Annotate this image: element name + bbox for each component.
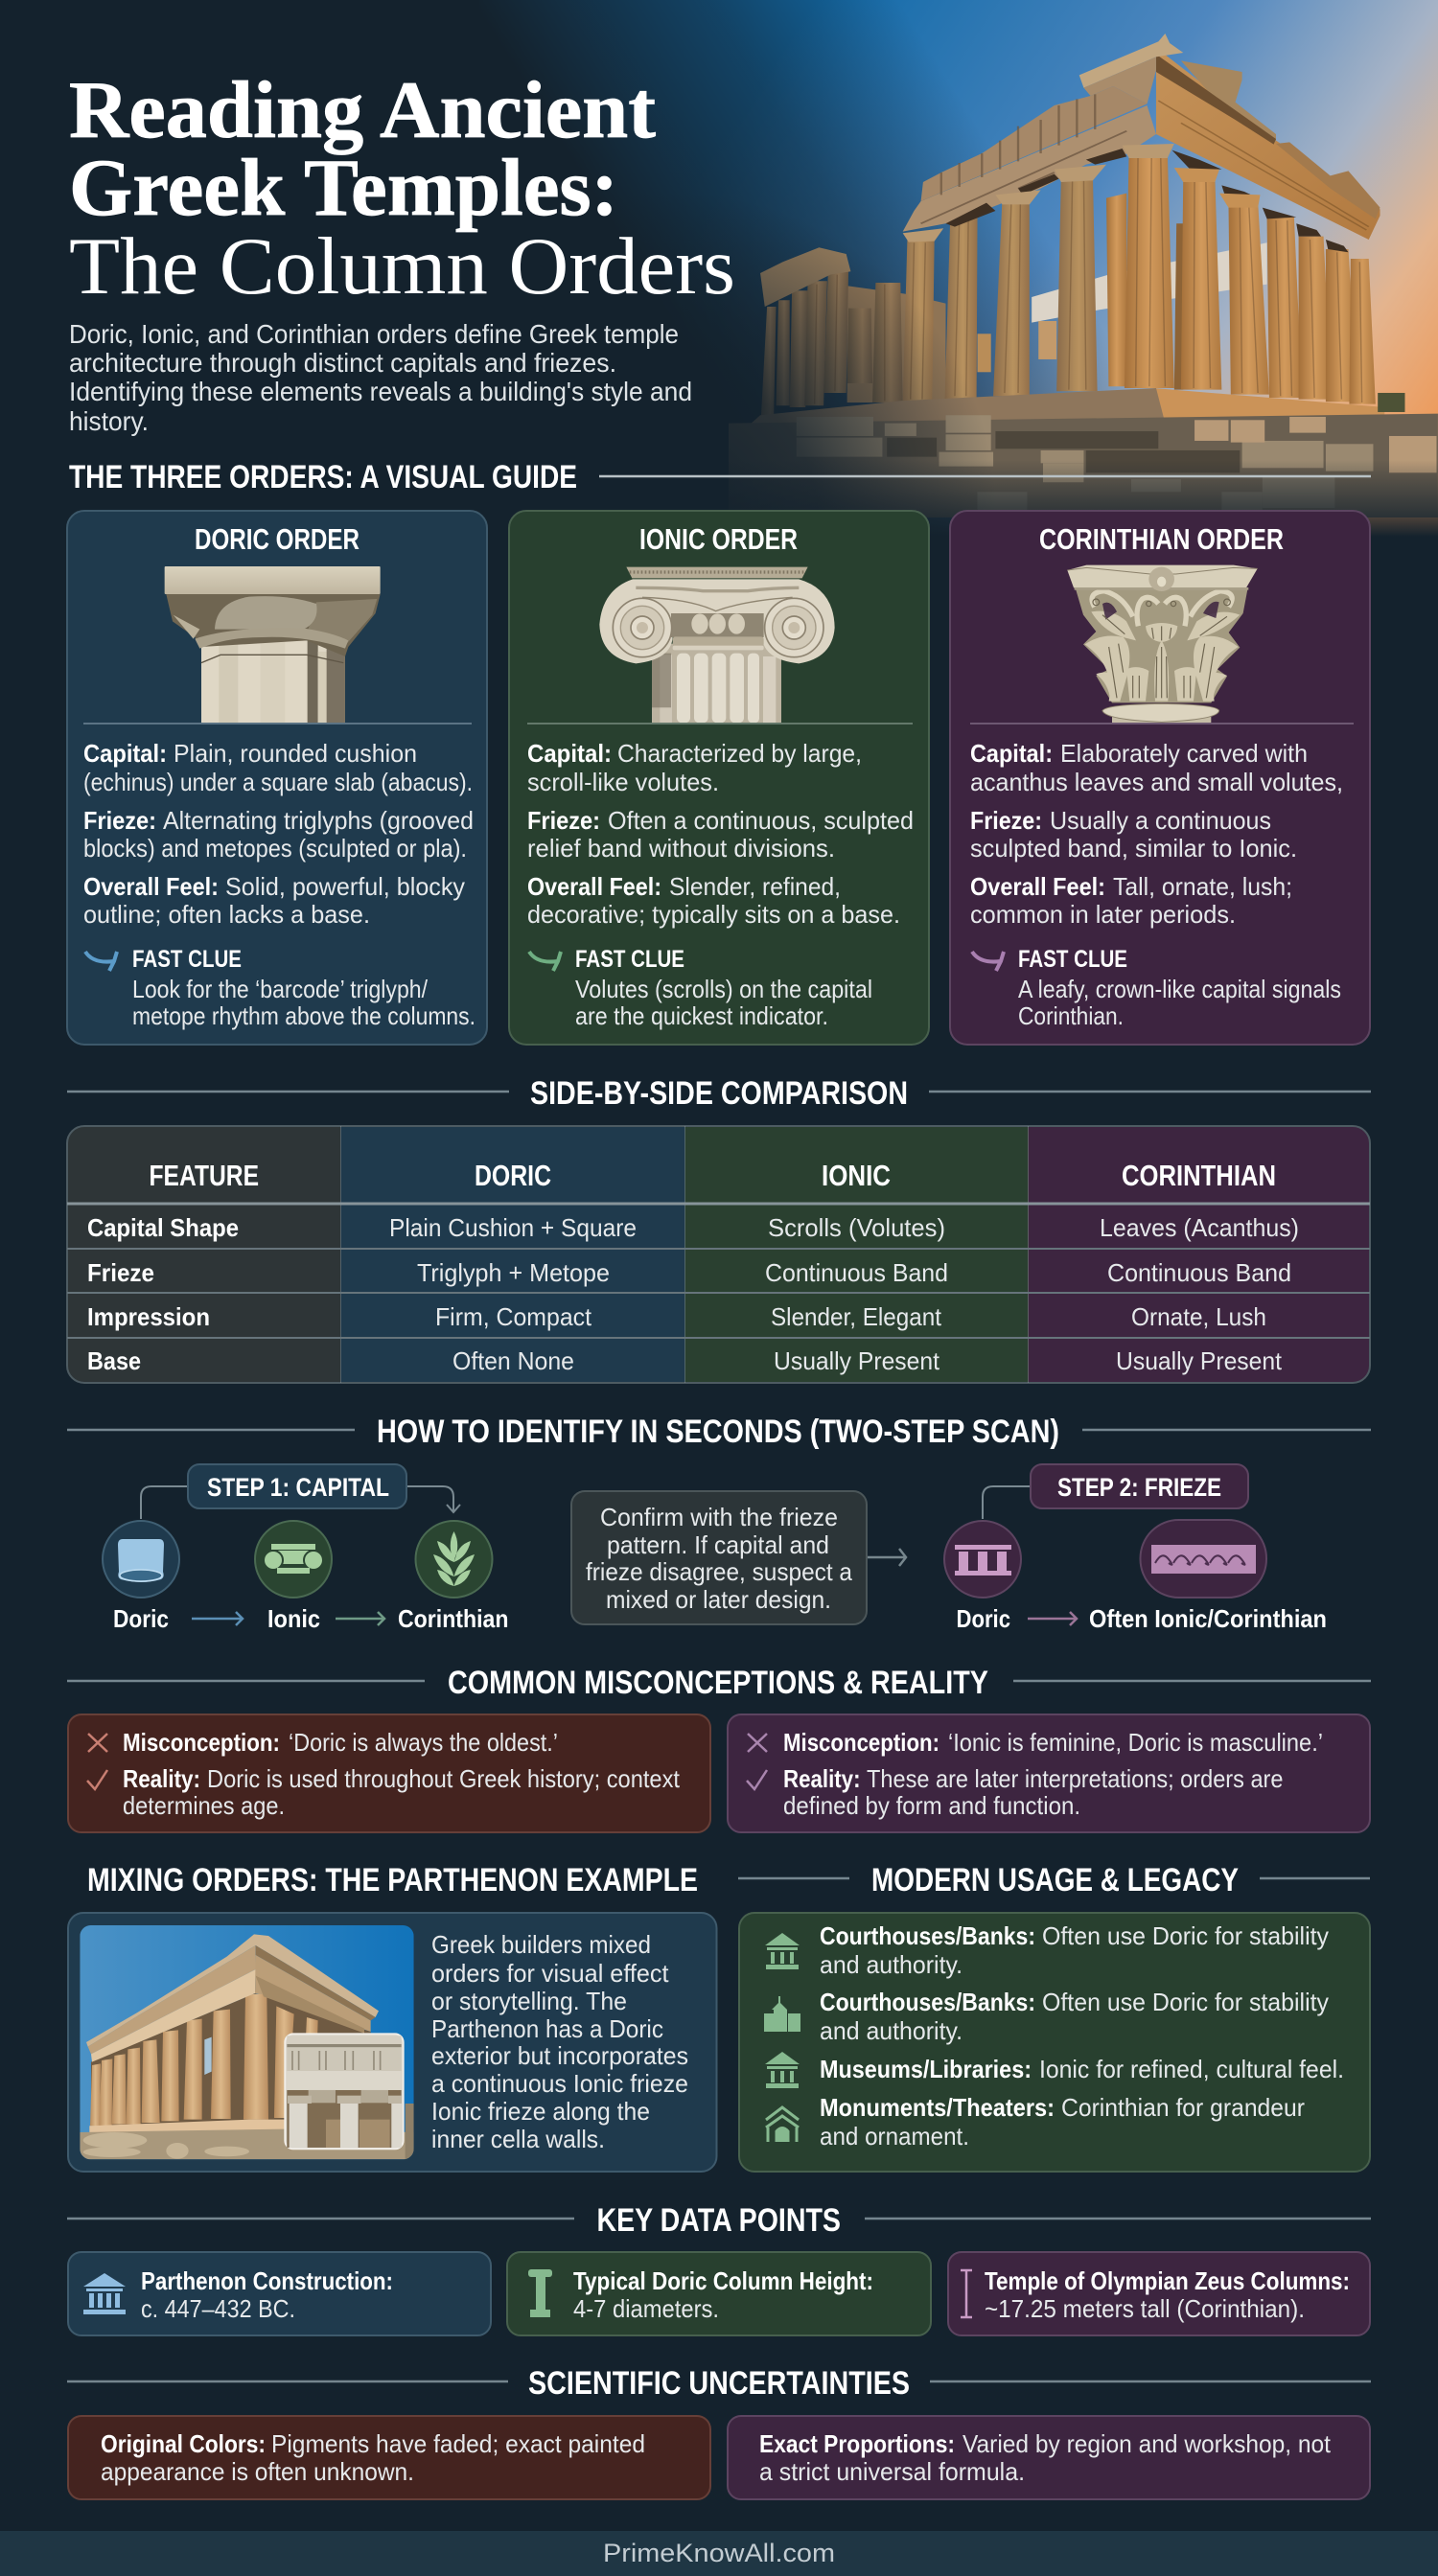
title <box>69 65 735 311</box>
text: corinthian description: Overall Feel: <box>970 872 1105 901</box>
pill: step 2 frieze: STEP 2: FRIEZE <box>1057 1473 1221 1502</box>
intro text: Identifying these elements reveals a building's style and <box>69 377 692 406</box>
step 2 flow <box>944 1464 1327 1633</box>
row: frieze: Triglyph + Metope <box>417 1258 610 1287</box>
text: corinthian description: Elaborately carved with <box>1060 739 1308 768</box>
text: parthenon description: a continuous Ionic frieze <box>431 2069 688 2098</box>
row: frieze <box>87 1258 1291 1287</box>
intro text: history. <box>69 406 149 436</box>
text: corinthian description: Usually a continuous <box>1050 806 1271 835</box>
row: impression <box>87 1302 1266 1331</box>
callout: confirm with frieze <box>571 1491 867 1624</box>
card: original colors: appearance is often unknown. <box>101 2457 414 2486</box>
text: doric description: Solid, powerful, blocky <box>225 872 465 901</box>
text: parthenon description: Parthenon has a Doric <box>431 2014 663 2043</box>
text: doric description <box>83 739 474 929</box>
text: corinthian description: Frieze: <box>970 806 1042 835</box>
card: doric column height <box>507 2252 931 2335</box>
title: Greek Temples: <box>69 143 618 233</box>
text: ionic description: relief band without divisions. <box>527 834 835 862</box>
fast clue: ionic: Volutes (scrolls) on the capital <box>575 975 872 1003</box>
labels: step 1: Ionic <box>267 1604 320 1633</box>
arrow: ionic to corinthian <box>336 1612 384 1625</box>
text: reality: Doric is used throughout Greek history; context <box>207 1764 681 1793</box>
text: reality: These are later interpretations; orders are <box>867 1764 1283 1793</box>
text: column height: 4-7 diameters. <box>573 2294 719 2323</box>
text: courthouses 1 <box>820 1921 1329 1979</box>
comparison table <box>67 1126 1370 1383</box>
text: corinthian description <box>970 739 1343 929</box>
icon: theater <box>766 2107 799 2142</box>
text: museums: Museums/Libraries: <box>820 2055 1032 2083</box>
callout: confirm with frieze: frieze disagree, suspect a <box>586 1557 852 1586</box>
card: original colors <box>68 2416 710 2499</box>
row: impression: Slender, Elegant <box>771 1302 942 1331</box>
text: ionic description: Overall Feel: <box>527 872 661 901</box>
labels: step 1: Doric <box>113 1604 169 1633</box>
icon: triglyph columns <box>944 1521 1021 1598</box>
fast clue: corinthian: A leafy, crown-like capital signals <box>1018 975 1341 1003</box>
intro text: architecture through distinct capitals and friezes. <box>69 348 616 378</box>
card: exact proportions <box>728 2416 1370 2499</box>
icon: courthouse <box>765 1933 800 1969</box>
step 1 flow <box>103 1464 508 1633</box>
callout: confirm with frieze: pattern. If capital and <box>607 1530 829 1559</box>
text: museums <box>820 2055 1344 2083</box>
text: ionic description: Capital: <box>527 739 612 768</box>
row: impression: Ornate, Lush <box>1131 1302 1266 1331</box>
row: base: Base <box>87 1346 141 1375</box>
text: doric description: Alternating triglyphs (grooved <box>163 806 474 835</box>
fast clue: ionic: FAST CLUE <box>575 946 684 973</box>
text: doric description: (echinus) under a square slab (abacus). <box>83 768 473 796</box>
text: ionic description: Often a continuous, sculpted <box>608 806 914 835</box>
text: corinthian description: acanthus leaves and small volutes, <box>970 768 1343 796</box>
text: misconception: Misconception: <box>783 1728 939 1757</box>
heading: doric order: DORIC ORDER <box>195 522 360 556</box>
panel: ionic order <box>509 511 929 1045</box>
panel: parthenon example <box>68 1913 717 2172</box>
labels: step 1 <box>113 1604 508 1633</box>
labels: step 2: Often Ionic/Corinthian <box>1089 1604 1327 1633</box>
text: parthenon description: or storytelling. The <box>431 1987 627 2015</box>
pill: step 1 capital: STEP 1: CAPITAL <box>207 1473 389 1502</box>
text: parthenon description: Ionic frieze along the <box>431 2097 650 2126</box>
text: monuments: Monuments/Theaters: <box>820 2093 1055 2122</box>
panel: misconception 2 <box>728 1714 1370 1832</box>
fast clue: ionic: are the quickest indicator. <box>575 1001 828 1030</box>
hero image: temple at sunset <box>345 0 1438 537</box>
row: base <box>87 1346 1283 1375</box>
text: corinthian description: sculpted band, similar to Ionic. <box>970 834 1297 862</box>
arrow: doric to ionic/corinthian <box>1028 1612 1077 1625</box>
text: doric description: Overall Feel: <box>83 872 219 901</box>
text: reality: determines age. <box>123 1791 285 1820</box>
icon: corinthian leaf <box>416 1521 493 1598</box>
icon: height bar <box>961 2270 972 2317</box>
fast clue: ionic <box>575 946 872 1030</box>
text: doric description: blocks) and metopes (sculpted or pla). <box>83 834 467 862</box>
row: base: Often None <box>452 1346 574 1375</box>
icon: ionic arrow <box>529 952 561 971</box>
pill: step 1 capital <box>188 1464 406 1508</box>
table header: DORIC <box>475 1159 551 1192</box>
row: capital shape: Capital Shape <box>87 1213 239 1242</box>
text: parthenon description: exterior but incorporates <box>431 2041 688 2070</box>
panel: doric order <box>67 511 487 1045</box>
connector: step 2 <box>983 1486 1031 1519</box>
fast clue: doric <box>132 946 475 1030</box>
text: ionic description: Frieze: <box>527 806 600 835</box>
heading: corinthian order: CORINTHIAN ORDER <box>1039 522 1284 556</box>
icon: ionic capital <box>255 1521 332 1598</box>
labels: step 2: Doric <box>957 1604 1010 1633</box>
row: capital shape: Plain Cushion + Square <box>389 1213 637 1242</box>
card: original colors: Original Colors: <box>101 2429 266 2458</box>
text: corinthian description: common in later periods. <box>970 900 1236 929</box>
title: The Column Orders <box>69 221 735 311</box>
image: ionic capital <box>599 567 835 723</box>
icon: bank building <box>764 1996 800 2032</box>
text: reality: defined by form and function. <box>783 1791 1080 1820</box>
text: courthouses 2: and authority. <box>820 2016 963 2045</box>
text: parthenon description <box>431 1930 688 2153</box>
row: impression: Firm, Compact <box>435 1302 592 1331</box>
pill: step 2 frieze <box>1031 1464 1248 1508</box>
icon: check <box>87 1770 107 1789</box>
text: parthenon construction: Parthenon Construction: <box>141 2266 393 2295</box>
icon: doric cushion <box>103 1521 179 1598</box>
panel: misconception 1 <box>68 1714 710 1832</box>
footer <box>0 2531 1438 2576</box>
card: exact proportions: Exact Proportions: <box>759 2429 955 2458</box>
table header: CORINTHIAN <box>1122 1159 1276 1192</box>
text: misconception: Misconception: <box>123 1728 280 1757</box>
callout: confirm with frieze: Confirm with the frieze <box>600 1503 838 1531</box>
row: capital shape <box>87 1213 1299 1242</box>
text: corinthian description: Capital: <box>970 739 1053 768</box>
icon: temple <box>83 2273 126 2314</box>
text: zeus columns: ~17.25 meters tall (Corinthian). <box>985 2294 1305 2323</box>
arrow: callout to step 2 <box>868 1549 906 1566</box>
text: doric description: Plain, rounded cushion <box>174 739 417 768</box>
row: capital shape: Scrolls (Volutes) <box>768 1213 945 1242</box>
icon: corinthian arrow <box>972 952 1004 971</box>
text: courthouses 1: Courthouses/Banks: <box>820 1921 1035 1950</box>
card: exact proportions: Varied by region and workshop, not <box>963 2429 1332 2458</box>
text: courthouses 1: Often use Doric for stability <box>1042 1921 1329 1950</box>
table header <box>150 1159 1276 1192</box>
image: doric capital <box>165 566 381 723</box>
fast clue: doric: metope rhythm above the columns. <box>132 1001 475 1030</box>
text: courthouses 2: Courthouses/Banks: <box>820 1988 1035 2016</box>
text: doric description: outline; often lacks a base. <box>83 900 370 929</box>
heading: modern usage: MODERN USAGE & LEGACY <box>871 1862 1239 1898</box>
text: courthouses 2 <box>820 1988 1329 2045</box>
heading: how to identify: HOW TO IDENTIFY IN SECONDS (TWO-STEP SCAN) <box>377 1414 1059 1450</box>
table header: FEATURE <box>150 1159 259 1192</box>
text: zeus columns <box>985 2266 1350 2323</box>
text: zeus columns: Temple of Olympian Zeus Columns: <box>985 2266 1350 2295</box>
text: parthenon description: Greek builders mixed <box>431 1930 651 1959</box>
text: monuments: Corinthian for grandeur <box>1061 2093 1305 2122</box>
panel: corinthian order <box>950 511 1370 1045</box>
text: reality: Reality: <box>123 1764 200 1793</box>
text: parthenon description: inner cella walls. <box>431 2125 605 2153</box>
icon: museum <box>765 2052 800 2088</box>
fast clue: corinthian <box>1018 946 1341 1030</box>
text: ionic description: scroll-like volutes. <box>527 768 719 796</box>
card: exact proportions: a strict universal formula. <box>759 2457 1025 2486</box>
text: monuments <box>820 2093 1305 2150</box>
text: reality: Reality: <box>783 1764 861 1793</box>
text: parthenon description: orders for visual effect <box>431 1959 669 1988</box>
image: parthenon <box>80 1925 414 2159</box>
row: impression: Impression <box>87 1302 210 1331</box>
text: reality <box>123 1764 681 1820</box>
icon: column <box>528 2269 552 2317</box>
heading: the three orders: THE THREE ORDERS: A VISUAL GUIDE <box>69 459 577 495</box>
fast clue: corinthian: FAST CLUE <box>1018 946 1127 973</box>
text: corinthian description: Tall, ornate, lush; <box>1113 872 1292 901</box>
table header: IONIC <box>822 1159 891 1192</box>
fast clue: doric: Look for the ‘barcode’ triglyph/ <box>132 975 429 1003</box>
row: capital shape: Leaves (Acanthus) <box>1100 1213 1299 1242</box>
title: Reading Ancient <box>69 65 656 155</box>
text: monuments: and ornament. <box>820 2122 969 2150</box>
connector: step 1 <box>141 1486 460 1519</box>
heading: key data points: KEY DATA POINTS <box>596 2202 841 2239</box>
text: misconception: ‘Doric is always the oldest.’ <box>289 1728 558 1757</box>
card: original colors: Pigments have faded; exact painted <box>271 2429 645 2458</box>
text: parthenon construction <box>141 2266 393 2323</box>
fast clue: corinthian: Corinthian. <box>1018 1001 1124 1030</box>
card: parthenon construction <box>68 2252 491 2335</box>
row: frieze: Continuous Band <box>765 1258 948 1287</box>
text: doric description: Capital: <box>83 739 167 768</box>
text: ionic description: Slender, refined, <box>669 872 841 901</box>
heading: side-by-side comparison: SIDE-BY-SIDE COMPARISON <box>530 1075 908 1112</box>
heading: scientific uncertainties: SCIENTIFIC UNCERTAINTIES <box>528 2365 910 2402</box>
panel: modern usage <box>739 1913 1370 2172</box>
row: base: Usually Present <box>1116 1346 1283 1375</box>
arrow: doric to ionic <box>192 1612 243 1625</box>
heading: mixing orders: MIXING ORDERS: THE PARTHENON EXAMPLE <box>87 1862 698 1898</box>
intro text: Doric, Ionic, and Corinthian orders define Greek temple <box>69 319 679 349</box>
icon: doric arrow <box>85 952 117 971</box>
text: column height: Typical Doric Column Height: <box>573 2266 873 2295</box>
labels: step 1: Corinthian <box>398 1604 508 1633</box>
icon: cross <box>748 1734 767 1752</box>
icon: cross <box>88 1734 107 1752</box>
text: parthenon construction: c. 447–432 BC. <box>141 2294 295 2323</box>
labels: step 2 <box>957 1604 1327 1633</box>
text: ionic description: Characterized by large, <box>617 739 862 768</box>
row: frieze: Frieze <box>87 1258 154 1287</box>
fast clue: doric: FAST CLUE <box>132 946 242 973</box>
icon: frieze band <box>1141 1520 1266 1598</box>
text: courthouses 1: and authority. <box>820 1950 963 1979</box>
text: ionic description <box>527 739 914 929</box>
text: courthouses 2: Often use Doric for stability <box>1042 1988 1329 2016</box>
heading: misconceptions: COMMON MISCONCEPTIONS & REALITY <box>448 1665 988 1701</box>
image: corinthian capital <box>1067 565 1258 724</box>
text: column height <box>573 2266 873 2323</box>
intro text <box>69 319 692 436</box>
text: doric description: Frieze: <box>83 806 156 835</box>
text: misconception <box>123 1728 558 1757</box>
text: misconception: ‘Ionic is feminine, Doric is masculine.’ <box>948 1728 1323 1757</box>
card: olympian zeus columns <box>948 2252 1370 2335</box>
image: inset frieze detail <box>285 2034 404 2149</box>
icon: check <box>747 1770 767 1789</box>
text: misconception <box>783 1728 1323 1757</box>
text: reality <box>783 1764 1283 1820</box>
text: ionic description: decorative; typically sits on a base. <box>527 900 900 929</box>
heading: ionic order: IONIC ORDER <box>639 522 798 556</box>
text: museums: Ionic for refined, cultural feel. <box>1039 2055 1344 2083</box>
callout: confirm with frieze: mixed or later design. <box>606 1585 831 1614</box>
row: frieze: Continuous Band <box>1107 1258 1291 1287</box>
footer: PrimeKnowAll.com <box>603 2539 835 2567</box>
row: base: Usually Present <box>774 1346 940 1375</box>
